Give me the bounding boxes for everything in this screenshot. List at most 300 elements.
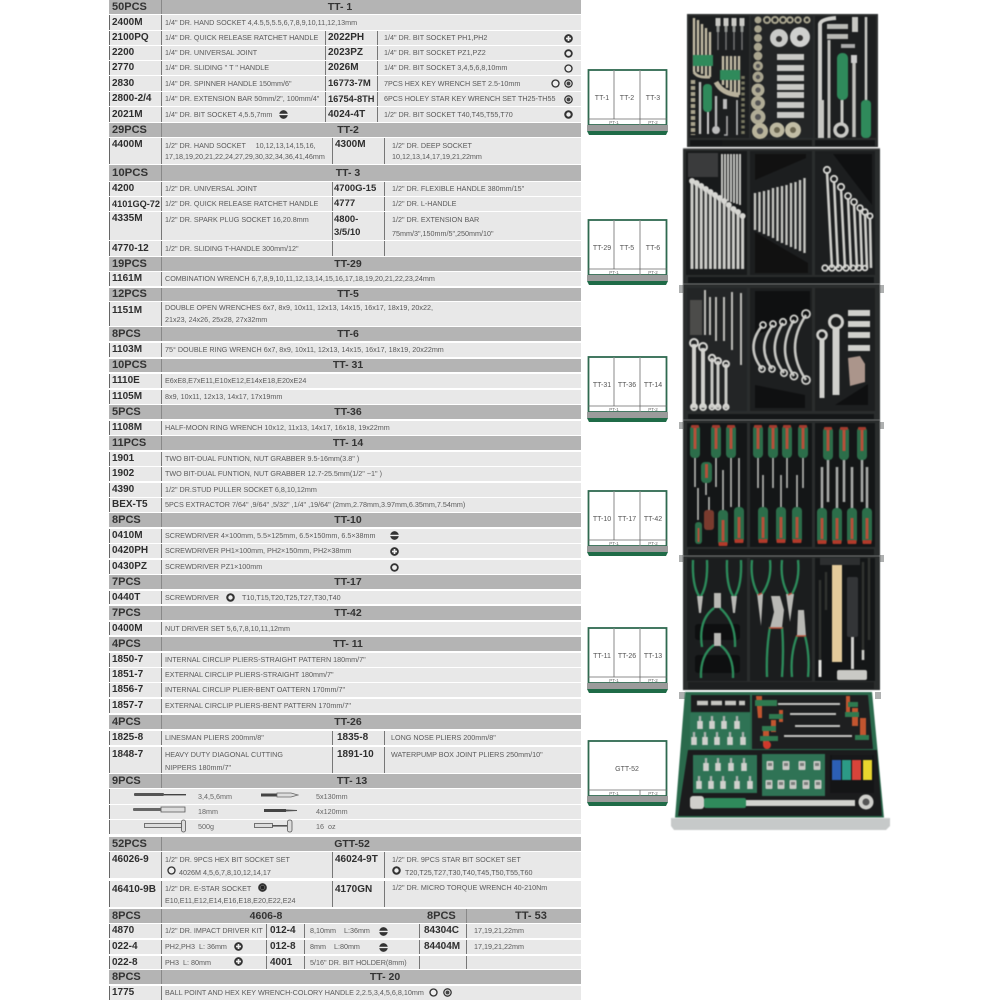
row: 4200 and 4700G-15: 1/2" DR. UNIVERSAL JOINT [165,184,257,193]
icon: slotted [379,927,388,936]
row: 1105M [109,390,581,404]
row: 4770-12: 4770-12 [112,243,149,254]
row: 4101GQ-72 and 4777: 4777 [334,198,355,209]
header: 7PCS TT-42 [109,606,581,620]
row: 4400M and 4300M: 1/2" DR. DEEP SOCKET [392,141,472,150]
row: 2100PQ and 2022PH: 1/4" DR. BIT SOCKET PH1,PH2 [384,33,487,42]
row: 1151M: DOUBLE OPEN WRENCHES 6x7, 8x9, 10x11, 12x13, 14x15, 16x17, 18x19, 20x22, [165,303,433,312]
row: 1105M: 1105M [112,391,142,402]
row: 0430PZ [109,560,581,574]
row: 2100PQ and 2022PH [109,31,581,45]
section: TT-20 8PCS [109,970,581,1000]
icon: torx [392,866,401,875]
row: 4870, 012-4 and 84304C: 84304C [424,925,459,936]
row: 46026-9 and 46024-9T: T20,T25,T27,T30,T40,T45,T50,T55,T60 [405,868,532,877]
header: 19PCS TT-29: TT-29 [334,258,362,270]
row: 0410M: SCREWDRIVER 4×100mm, 5.5×125mm, 6.5×150mm, 6.5×38mm [165,531,376,540]
row: 1902: TWO BIT-DUAL FUNTION, NUT GRABBER 12.7-25.5mm(1/2" ~1" ) [165,469,382,478]
header: 8PCS 4606-8 and 8PCS TT-53: 8PCS [112,910,141,922]
row: 4101GQ-72 and 4777: 1/2" DR. L-HANDLE [392,199,456,208]
icon: hammer 16 oz [254,820,292,832]
section: TT-2 29PCS [109,123,581,164]
header: 12PCS TT-5: 12PCS [112,288,147,300]
header: 5PCS TT-36: TT-36 [334,406,362,418]
row: 4400M and 4300M: 10,12,13,14,17,19,21,22mm [392,152,482,161]
diagram: TT-11 TT-26 TT-13: TT-13 [644,653,662,660]
row: 1851-7 [109,668,581,682]
icon: hex [564,64,573,73]
row: 1775 [109,986,581,1000]
icon: phillips [390,547,399,556]
row: 1850-7 [109,653,581,667]
row: 4770-12 [109,241,581,256]
header: 8PCS TT-6 [109,327,581,341]
row: 46026-9 and 46024-9T: 4026M 4,5,6,7,8,10,12,14,17 [179,868,271,877]
row: 022-4, 012-8 and 84404M: 012-8 [270,941,296,952]
row: 1775: 1775 [112,987,134,998]
row: 4335M and 4800-3/5/10: 4800- [334,214,358,225]
row: 1108M: 1108M [112,422,142,433]
row: 2100PQ and 2022PH: 1/4" DR. QUICK RELEASE RATCHET HANDLE [165,33,318,42]
header: 10PCS TT-31: 10PCS [112,359,147,371]
icon: pin punch [134,793,186,796]
row: 2100PQ and 2022PH: 2100PQ [112,32,149,43]
row: 4400M and 4300M: 1/2" DR. HAND SOCKET 10,12,13,14,15,16, [165,141,316,150]
header: 52PCS GTT-52 [109,837,581,851]
drawer 5: pliers, hammers and punches [683,556,880,690]
header: 8PCS TT-10 [109,513,581,527]
row: 0440T: 0440T [112,592,140,603]
header: 7PCS TT-17: TT-17 [334,576,362,588]
icon: hex [429,988,438,997]
row: 1850-7: INTERNAL CIRCLIP PLIERS-STRAIGHT PATTERN 180mm/7" [165,655,366,664]
row: 4400M and 4300M: 4300M [335,139,366,150]
diagram: TT-29 TT-5 TT-6: PT-1 [609,270,619,275]
row: 46410-9B and 4170GN: 4170GN [335,884,372,895]
header: 7PCS TT-17: 7PCS [112,576,141,588]
row: 0440T [109,591,581,604]
header: 4PCS TT-26: TT-26 [334,716,362,728]
diagram: TT-31 TT-36 TT-14: TT-14 [644,382,662,389]
icon: pozidriv [390,563,399,572]
header: 10PCS TT-3: 10PCS [112,167,148,179]
diagram: TT-31 TT-36 TT-14 [587,357,668,422]
row: 022-4, 012-8 and 84404M: 17,19,21,22mm [474,942,524,951]
diagram: TT-31 TT-36 TT-14: TT-31 [593,382,611,389]
row: 46026-9 and 46024-9T [109,852,581,878]
row: 46410-9B and 4170GN [109,881,581,907]
header: 8PCS TT-20 [109,970,581,984]
row: 1857-7: 1857-7 [112,700,143,711]
row: 2021M and 4024-4T: 1/4" DR. BIT SOCKET 4,5.5,7mm [165,110,272,119]
icon: hex [167,866,176,875]
header: 4PCS TT-11: 4PCS [112,638,141,650]
icon: flat chisel [133,806,186,812]
row: 4870, 012-4 and 84304C: 17,19,21,22mm [474,926,524,935]
row: 1825-8 and 1835-8: LINESMAN PLIERS 200mm/8" [165,733,264,742]
icon: phillips [234,957,243,966]
row: 022-4, 012-8 and 84404M: 8mm L:80mm [310,942,360,951]
row: 4335M and 4800-3/5/10: 75mm/3",150mm/5",250mm/10" [392,229,494,238]
row: BEX-T5 [109,498,581,512]
row: 2770 and 2026M: 1/4" DR. BIT SOCKET 3,4,5,6,8,10mm [384,63,507,72]
row: 4335M and 4800-3/5/10: 1/2" DR. SPARK PLUG SOCKET 16,20.8mm [165,215,309,224]
diagram: TT-1 TT-2 TT-3: TT-1 [595,95,609,102]
row: 1108M [109,421,581,435]
row: 1825-8 and 1835-8: 1825-8 [112,732,143,743]
section: TT-10 8PCS [109,513,581,574]
diagram: TT-29 TT-5 TT-6: PT-2 [648,270,658,275]
row: 2830 and 16773-7M [109,76,581,91]
row: punches [109,789,581,804]
row: 0420PH [109,544,581,558]
icon: torx [564,110,573,119]
row: 4101GQ-72 and 4777: 1/2" DR. QUICK RELEASE RATCHET HANDLE [165,199,318,208]
row: 4335M and 4800-3/5/10 [109,212,581,240]
header: 8PCS TT-20: 8PCS [112,971,141,983]
header: 8PCS 4606-8 and 8PCS TT-53: 8PCS [427,910,456,922]
row: 4390: 1/2" DR.STUD PULLER SOCKET 6,8,10,12mm [165,485,317,494]
diagram: TT-1 TT-2 TT-3: TT-2 [620,95,634,102]
row: 4200 and 4700G-15: 4700G-15 [334,183,376,194]
row: 0430PZ: SCREWDRIVER PZ1×100mm [165,562,262,571]
diagram: TT-29 TT-5 TT-6: TT-6 [646,245,660,252]
drawer 1: sockets, hex keys and handles [687,14,878,147]
header: 7PCS TT-17 [109,575,581,589]
row: 1856-7: INTERNAL CIRCLIP PLIER-BENT OATTERN 170mm/7" [165,685,345,694]
row: 2100PQ and 2022PH: 2022PH [328,32,364,43]
diagram: TT-31 TT-36 TT-14: PT-2 [648,407,658,412]
row: 0420PH: 0420PH [112,545,148,556]
header: 4PCS TT-11 [109,637,581,651]
row: 1848-7 and 1891-10: HEAVY DUTY DIAGONAL CUTTING [165,750,283,759]
row: 4200 and 4700G-15: 4200 [112,183,134,194]
row: 2770 and 2026M: 2026M [328,62,359,73]
diagram: TT-11 TT-26 TT-13: TT-11 [593,653,611,660]
row: chisels [109,805,581,819]
row: 1848-7 and 1891-10: 1848-7 [112,749,143,760]
row: 4870, 012-4 and 84304C: 4870 [112,925,134,936]
header: 8PCS 4606-8 and 8PCS TT-53: TT- 53 [515,910,547,922]
header: 10PCS TT-31: TT- 31 [333,359,363,371]
row: 0400M: 0400M [112,623,143,634]
row: 1161M: 1161M [112,273,142,284]
row: 4400M and 4300M: 4400M [112,139,143,150]
section: TT-5 12PCS [109,288,581,326]
header: 5PCS TT-36: 5PCS [112,406,141,418]
icon: e-star [258,883,267,892]
diagram: TT-1 TT-2 TT-3: PT-2 [648,120,658,125]
row: 4390: 4390 [112,484,134,495]
row: punches: 3,4,5,6mm [198,792,232,801]
section: 4606-8 and TT-53 8PCS [109,909,581,969]
drawer 6: open GTT-52 tray [671,692,890,830]
row: 1901: 1901 [112,453,134,464]
header: 8PCS 4606-8 and 8PCS TT-53 [109,909,581,923]
row: 1825-8 and 1835-8 [109,731,581,745]
row: 4400M and 4300M: 17,18,19,20,21,22,24,27,29,30,32,34,36,41,46mm [165,152,325,161]
row: 1161M: COMBINATION WRENCH 6,7,8,9,10,11,12,13,14,15,16,17,18,19,20,21,22,23,24mm [165,274,435,283]
row: 4870, 012-4 and 84304C [109,924,581,938]
drawer 4: screwdrivers and nut drivers [683,420,880,556]
diagram: TT-11 TT-26 TT-13 [587,628,668,693]
icon: hammer 500g [144,820,186,832]
header: 9PCS TT-13 [109,774,581,788]
diagram: GTT-52: PT-2 [648,791,658,796]
row: hammers: 16 oz [316,822,336,831]
row: 4200 and 4700G-15 [109,182,581,196]
diagram: GTT-52 [587,741,668,806]
icon: holey star [564,95,573,104]
row: 1848-7 and 1891-10 [109,747,581,773]
icon: torx [226,593,235,602]
header: 8PCS TT-20: TT- 20 [370,971,400,983]
icon: pozidriv [564,49,573,58]
header: 50PCS TT-1 [109,0,581,14]
row: 0400M: NUT DRIVER SET 5,6,7,8,10,11,12mm [165,624,290,633]
row: 46026-9 and 46024-9T: 1/2" DR. 9PCS STAR BIT SOCKET SET [392,855,521,864]
row: 2770 and 2026M: 1/4" DR. SLIDING " T " HANDLE [165,63,269,72]
row: 2021M and 4024-4T: 1/2" DR. BIT SOCKET T40,T45,T55,T70 [384,110,513,119]
row: 1850-7: 1850-7 [112,654,143,665]
header: 11PCS TT-14: TT- 14 [333,437,363,449]
row: 1901: TWO BIT-DUAL FUNTION, NUT GRABBER 9.5-16mm(3.8" ) [165,454,359,463]
row: 1151M: 21x23, 24x26, 25x28, 27x32mm [165,315,267,324]
header: 50PCS TT-1: TT- 1 [328,1,352,13]
row: 022-8 and 4001: 5/16" DR. BIT HOLDER(8mm) [310,958,407,967]
header: 50PCS TT-1: 50PCS [112,1,147,13]
diagram: TT-29 TT-5 TT-6: TT-5 [620,245,634,252]
diagram: TT-11 TT-26 TT-13: PT-1 [609,678,619,683]
row: BEX-T5: BEX-T5 [112,499,148,510]
header: 12PCS TT-5: TT-5 [337,288,359,300]
section: TT-11 4PCS [109,637,581,713]
row: 2200 and 2023PZ: 1/4" DR. UNIVERSAL JOINT [165,48,257,57]
diagram: TT-11 TT-26 TT-13: TT-26 [618,653,636,660]
row: 1851-7: 1851-7 [112,669,143,680]
section: TT-14 11PCS [109,436,581,512]
row: 0430PZ: 0430PZ [112,561,147,572]
diagram: TT-10 TT-17 TT-42: PT-2 [648,541,658,546]
icon: phillips [564,34,573,43]
row: 1857-7: EXTERNAL CIRCLIP PLIERS-BENT PATTERN 170mm/7" [165,701,351,710]
row: 4335M and 4800-3/5/10: 1/2" DR. EXTENSION BAR [392,215,479,224]
section: TT-17 7PCS [109,575,581,604]
header: 12PCS TT-5 [109,288,581,301]
row: 1110E [109,374,581,388]
row: 1110E: E6xE8,E7xE11,E10xE12,E14xE18,E20xE24 [165,376,306,385]
diagram: TT-10 TT-17 TT-42: TT-17 [618,516,636,523]
row: 46410-9B and 4170GN: 46410-9B [112,884,156,895]
header: 11PCS TT-14: 11PCS [112,437,146,449]
row: 2800-2/4 and 16754-8TH: 2800-2/4 [112,93,151,104]
diagram: TT-10 TT-17 TT-42 [587,491,668,556]
row: 2021M and 4024-4T [109,107,581,122]
row: 1856-7 [109,683,581,697]
row: BEX-T5: 5PCS EXTRACTOR 7/64" ,9/64" ,5/32" ,1/4" ,19/64" (2mm,2.78mm,3.97mm,6.35mm,7.54mm) [165,500,465,509]
row: 2830 and 16773-7M: 7PCS HEX KEY WRENCH SET 2.5-10mm [384,79,520,88]
header: 8PCS 4606-8 and 8PCS TT-53: 4606-8 [250,910,282,922]
row: 022-4, 012-8 and 84404M: 022-4 [112,941,138,952]
row: 1103M: 75° DOUBLE RING WRENCH 6x7, 8x9, 10x11, 12x13, 14x15, 16x17, 18x19, 20x22mm [165,345,444,354]
header: 8PCS TT-10: TT-10 [334,514,362,526]
row: 2021M and 4024-4T: 4024-4T [328,109,365,120]
row: 2800-2/4 and 16754-8TH: 16754-8TH [328,94,375,104]
row: 2400M: 2400M [112,17,143,28]
icon: slotted [390,531,399,540]
row: 46410-9B and 4170GN: 1/2" DR. E-STAR SOCKET [165,884,251,893]
row: 2400M: 1/4" DR. HAND SOCKET 4,4.5,5,5.5,6,7,8,9,10,11,12,13mm [165,18,357,27]
drawer 2: combination and double ring wrenches [683,148,880,284]
row: hammers: 500g [198,822,214,831]
icon: phillips [234,942,243,951]
icon: star [443,988,452,997]
header: 52PCS GTT-52: 52PCS [112,838,147,850]
icon: slotted [379,943,388,952]
row: 4870, 012-4 and 84304C: 012-4 [270,925,296,936]
row: hammers [109,820,581,834]
row: 4101GQ-72 and 4777: 4101GQ-72 [112,199,160,209]
icon: hex [551,79,560,88]
row: 46410-9B and 4170GN: 1/2" DR. MICRO TORQUE WRENCH 40-210Nm [392,883,547,892]
header: 29PCS TT-2: 29PCS [112,124,147,136]
row: chisels: 18mm [198,807,218,816]
row: 1902: 1902 [112,468,134,479]
row: 2770 and 2026M [109,61,581,75]
header: 19PCS TT-29 [109,257,581,271]
section: TT-6 8PCS [109,327,581,357]
icon: center punch [261,792,299,798]
row: 4870, 012-4 and 84304C: 1/2" DR. IMPACT DRIVER KIT [165,926,263,935]
section: TT-1 50PCS [109,0,581,122]
icon: cape chisel [264,809,297,812]
row: 2830 and 16773-7M: 1/4" DR. SPINNER HANDLE 150mm/6" [165,79,292,88]
diagram: TT-1 TT-2 TT-3: TT-3 [646,95,660,102]
row: 0440T: SCREWDRIVER [165,593,219,602]
header: 29PCS TT-2 [109,123,581,137]
row: 1851-7: EXTERNAL CIRCLIP PLIERS-STRAIGHT 180mm/7" [165,670,334,679]
icon: star [564,79,573,88]
header: 9PCS TT-13: 9PCS [112,775,141,787]
header: 29PCS TT-2: TT-2 [337,124,359,136]
row: 2800-2/4 and 16754-8TH: 6PCS HOLEY STAR KEY WRENCH SET TH25-TH55 [384,94,555,103]
diagram: TT-31 TT-36 TT-14: TT-36 [618,382,636,389]
row: 1825-8 and 1835-8: LONG NOSE PLIERS 200mm/8" [391,733,496,742]
row: 1902 [109,467,581,481]
drawer 3: flare and half-moon wrenches [683,284,880,420]
row: 2830 and 16773-7M: 2830 [112,78,134,89]
row: 0420PH: SCREWDRIVER PH1×100mm, PH2×150mm, PH2×38mm [165,546,351,555]
diagram: TT-31 TT-36 TT-14: PT-1 [609,407,619,412]
row: 1108M: HALF-MOON RING WRENCH 10x12, 11x13, 14x17, 16x18, 19x22mm [165,423,390,432]
diagram: TT-10 TT-17 TT-42: PT-1 [609,541,619,546]
header: 11PCS TT-14 [109,436,581,450]
row: 4200 and 4700G-15: 1/2" DR. FLEXIBLE HANDLE 380mm/15" [392,184,524,193]
header: 19PCS TT-29: 19PCS [112,258,147,270]
row: 2770 and 2026M: 2770 [112,62,134,73]
row: 2200 and 2023PZ: 2023PZ [328,47,363,58]
section: TT-36 5PCS [109,405,581,435]
row: 4335M and 4800-3/5/10: 3/5/10 [334,227,360,238]
row: 1857-7 [109,699,581,713]
diagram: TT-29 TT-5 TT-6 [587,220,668,285]
row: 1848-7 and 1891-10: 1891-10 [337,749,374,760]
row: 1110E: 1110E [112,375,140,386]
header: 5PCS TT-36 [109,405,581,419]
row: 1848-7 and 1891-10: NIPPERS 180mm/7" [165,763,231,772]
diagram: TT-29 TT-5 TT-6: TT-29 [593,245,611,252]
row: 2200 and 2023PZ: 1/4" DR. BIT SOCKET PZ1,PZ2 [384,48,486,57]
row: 022-8 and 4001: 4001 [270,957,292,968]
row: 1103M [109,343,581,357]
diagram: TT-1 TT-2 TT-3 [587,70,668,135]
row: 2800-2/4 and 16754-8TH: 1/4" DR. EXTENSION BAR 50mm/2", 100mm/4" [165,94,319,103]
row: 4770-12: 1/2" DR. SLIDING T-HANDLE 300mm/12" [165,244,299,253]
row: 1103M: 1103M [112,344,142,355]
row: 46026-9 and 46024-9T: 46024-9T [335,854,378,865]
row: 1151M [109,302,581,326]
row: 1856-7: 1856-7 [112,684,143,695]
header: 8PCS TT-6: TT-6 [337,328,359,340]
diagram: GTT-52: GTT-52 [615,766,639,773]
row: punches: 5x130mm [316,792,348,801]
row: 1901 [109,452,581,466]
section: GTT-52 52PCS [109,837,581,907]
row: 0440T: T10,T15,T20,T25,T27,T30,T40 [242,593,341,602]
row: 2200 and 2023PZ: 2200 [112,47,134,58]
row: 1105M: 8x9, 10x11, 12x13, 14x17, 17x19mm [165,392,282,401]
row: 1775: BALL POINT AND HEX KEY WRENCH-COLORY HANDLE 2,2.5,3,4,5,6,8,10mm [165,988,424,997]
row: 0410M: 0410M [112,530,143,541]
header: 4PCS TT-26 [109,715,581,729]
row: 022-4, 012-8 and 84404M: PH2,PH3 L: 36mm [165,942,227,951]
row: 0400M [109,622,581,635]
row: 022-8 and 4001: PH3 L: 80mm [165,958,211,967]
header: 7PCS TT-42: TT-42 [334,607,362,619]
diagram: TT-11 TT-26 TT-13: PT-2 [648,678,658,683]
section: TT-29 19PCS [109,257,581,286]
section: TT-13 9PCS [109,774,581,834]
row: 4400M and 4300M [109,138,581,164]
header: 10PCS TT-3 [109,165,581,181]
row: 1161M [109,272,581,286]
row: 022-8 and 4001: 022-8 [112,957,138,968]
row: 4101GQ-72 and 4777 [109,197,581,211]
header: 7PCS TT-42: 7PCS [112,607,141,619]
row: 2830 and 16773-7M: 16773-7M [328,78,371,89]
row: 46026-9 and 46024-9T: 1/2" DR. 9PCS HEX BIT SOCKET SET [165,855,290,864]
icon: slotted [279,110,288,119]
row: 1151M: 1151M [112,305,142,316]
row: 022-4, 012-8 and 84404M: 84404M [424,941,460,952]
row: 2200 and 2023PZ [109,46,581,60]
row: 2400M [109,15,581,30]
diagram: TT-10 TT-17 TT-42: TT-10 [593,516,611,523]
row: 0410M [109,529,581,543]
diagram: GTT-52: PT-1 [609,791,619,796]
row: 46410-9B and 4170GN: E10,E11,E12,E14,E16,E18,E20,E22,E24 [165,896,296,905]
row: 022-4, 012-8 and 84404M [109,940,581,954]
row: 4870, 012-4 and 84304C: 8,10mm L:36mm [310,926,370,935]
section: TT-31 10PCS [109,359,581,404]
row: chisels: 4x120mm [316,807,348,816]
section: TT-26 4PCS [109,715,581,773]
row: 4335M and 4800-3/5/10: 4335M [112,213,143,224]
header: 4PCS TT-26: 4PCS [112,716,141,728]
row: 46026-9 and 46024-9T: 46026-9 [112,854,149,865]
header: 52PCS GTT-52: GTT-52 [334,838,370,850]
diagram: TT-1 TT-2 TT-3: PT-1 [609,120,619,125]
